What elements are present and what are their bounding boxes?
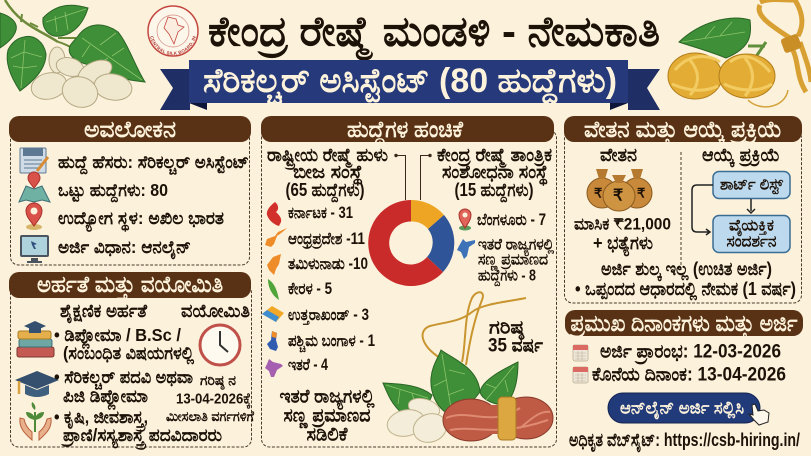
legend text: small numbers in other states: ಇತರೆ ರಾಜ್ಯಗಳಲ್ಲಿ — [478, 236, 555, 257]
icon: computer monitor — [21, 236, 48, 263]
step: personal interview — [713, 216, 790, 252]
institute label: central silk research: ಕೇಂದ್ರ ರೇಷ್ಮೆ ತಾಂತ್ರಿಕ — [437, 145, 552, 168]
legend text: bengaluru: ಬೆಂಗಳೂರು - 7 — [477, 211, 546, 229]
callout: relaxation for other states — [280, 386, 375, 446]
distribution heading: ಹುದ್ದೆಗಳ ಹಂಚಿಕೆ — [347, 116, 464, 146]
icon: clock — [200, 325, 240, 365]
ribbon banner — [160, 60, 660, 110]
legend: state list — [262, 202, 375, 377]
subheading: selection process: ಆಯ್ಕೆ ಪ್ರಕ್ರಿಯೆ — [702, 145, 780, 167]
state: west bengal: ಪಶ್ಚಿಮ ಬಂಗಾಳ - 1 — [288, 332, 375, 353]
salary amount: ಮಾಸಿಕ ₹21,000 — [574, 214, 671, 234]
ribbon banner: ಸೆರಿಕಲ್ಚರ್ ಅಸಿಸ್ಟೆಂಟ್ (80 ಹುದ್ದೆಗಳು) — [203, 62, 617, 105]
education text: diploma: • ಡಿಪ್ಲೋಮಾ / B.Sc / — [54, 325, 181, 350]
institute label: national silkworm seed — [267, 145, 388, 203]
panel: overview — [9, 116, 251, 265]
state: others: ಇತರೆ - 4 — [288, 356, 329, 374]
legend text: small numbers in other states — [478, 236, 555, 287]
icon: graduation cap — [15, 371, 59, 397]
callout: maximum 35 years: ಗರಿಷ್ಠ — [489, 318, 525, 341]
illustration: mulberry leaves and cocoons, top left — [0, 0, 145, 112]
state: kerala: ಕೇರಳ - 5 — [288, 280, 332, 298]
state: west bengal — [267, 331, 375, 353]
age text: maximum as on date: ಮೀಸಲಾತಿ ವರ್ಗಗಳಿಗೆ — [166, 408, 254, 424]
institute label: central silk research: ಸಂಶೋಧನಾ ಸಂಸ್ಥೆ — [442, 162, 548, 186]
callout: relaxation for other states: ಇತರೆ ರಾಜ್ಯಗಳಲ್ಲಿ — [280, 386, 375, 411]
education text: sericulture degree: • ಸೆರಿಕಲ್ಚರ್ ಪದವಿ ಅಥವಾ — [54, 367, 193, 390]
subheading: age limit: ವಯೋಮಿತಿ — [181, 301, 250, 321]
legend text: small numbers in other states: ಸಣ್ಣ ಪ್ರಮಾಣದ — [478, 252, 548, 271]
overview heading: ಅವಲೋಕನ — [84, 116, 176, 142]
step: shortlist: ಶಾರ್ಟ್ ಲಿಸ್ಟ್ — [720, 176, 784, 196]
button: apply online — [608, 393, 760, 423]
panel: salary and selection process — [564, 116, 802, 303]
arrow: side connector — [692, 185, 713, 235]
overview text: application mode: ಅರ್ಜಿ ವಿಧಾನ: ಆನಲೈನ್ — [58, 237, 191, 260]
step: personal interview: ವೈಯಕ್ತಿಕ — [729, 218, 774, 237]
overview text: post name: ಹುದ್ದೆ ಹೆಸರು: ಸೆರಿಕಲ್ಚರ್ ಅಸಿಸ್ಟೆಂಟ್ — [58, 152, 249, 175]
icon: rupee money bags — [587, 169, 652, 211]
overview heading — [9, 116, 251, 142]
panel: post distribution — [261, 116, 556, 447]
note: no application fee: ಅರ್ಜಿ ಶುಲ್ಕ ಇಲ್ಲ (ಉಚಿತ ಅರ್ಜಿ) — [601, 259, 772, 281]
panel: key dates and application — [565, 310, 803, 453]
state: andhra pradesh — [265, 228, 365, 250]
state: kerala — [268, 279, 332, 300]
donut chart — [368, 200, 454, 286]
title: ಕೇಂದ್ರ ರೇಷ್ಮೆ ಮಂಡಳಿ - ನೇಮಕಾತಿ — [208, 8, 660, 61]
overview text: job location: ಉದ್ಯೋಗ ಸ್ಥಳ: ಅಖಿಲ ಭಾರತ — [58, 208, 225, 232]
state: andhra pradesh: ಆಂಧ್ರಪ್ರದೇಶ -11 — [288, 230, 365, 250]
logo: central silk board seal — [147, 5, 199, 57]
age text: maximum as on date: ಗರಿಷ್ಠ ನ — [200, 372, 236, 390]
subheading: education: ಶೈಕ್ಷಣಿಕ ಅರ್ಹತೆ — [60, 301, 148, 324]
icon: books and cap — [17, 321, 54, 357]
education text: agriculture biology graduates: • ಕೃಷಿ, ಜೀವಶಾಸ್ತ್ರ, — [54, 407, 148, 432]
callout: relaxation for other states: ಸಣ್ಣ ಪ್ರಮಾಣದ — [284, 406, 370, 430]
leader lines — [395, 154, 431, 200]
state: uttarakhand: ಉತ್ತರಾಖಂಡ್ - 3 — [288, 306, 369, 325]
age text: maximum as on date — [166, 372, 254, 424]
icon: jobs newspaper — [20, 148, 48, 173]
icon: location pin bengaluru — [459, 209, 471, 230]
state: tamil nadu: ತಮಿಳುನಾಡು -10 — [288, 255, 368, 273]
icon: calendar end — [573, 367, 588, 383]
salary heading: ವೇತನ ಮತ್ತು ಆಯ್ಕೆ ಪ್ರಕ್ರಿಯೆ — [584, 116, 782, 145]
age text: maximum as on date: 13-04-2026ಕ್ಕೆ — [176, 390, 251, 410]
distribution heading — [261, 116, 554, 146]
education text: sericulture degree: ಪಿಜಿ ಡಿಪ್ಲೋಮಾ — [63, 386, 148, 411]
overview text: total posts: ಒಟ್ಟು ಹುದ್ದೆಗಳು: 80 — [58, 180, 168, 203]
button: apply online: ಆನ್‌ಲೈನ್ ಅರ್ಜಿ ಸಲ್ಲಿಸಿ — [620, 398, 744, 420]
step: personal interview: ಸಂದರ್ಶನ — [726, 234, 777, 250]
subheading: salary: ವೇತನ — [600, 145, 637, 165]
education text: diploma: (ಸಂಬಂಧಿತ ವಿಷಯಗಳಲ್ಲಿ — [63, 343, 195, 365]
icon: calendar start — [573, 345, 588, 361]
institute label: central silk research — [437, 145, 552, 203]
flowchart: selection steps — [692, 172, 790, 252]
icon: location pin — [26, 203, 42, 230]
callout: relaxation for other states: ಸಡಿಲಿಕೆ — [306, 424, 349, 446]
state: karnataka — [267, 202, 353, 226]
callout: maximum 35 years: 35 ವರ್ಷ — [488, 336, 543, 356]
education text: diploma — [54, 325, 195, 365]
institute label: central silk research: (15 ಹುದ್ದೆಗಳು) — [454, 180, 534, 203]
icon: india map blue — [457, 239, 475, 259]
icon: rupee money bags: ₹ — [613, 188, 623, 204]
institute label: national silkworm seed: (65 ಹುದ್ದೆಗಳು) — [286, 180, 364, 203]
icon: rupee money bags: ₹ — [594, 186, 603, 200]
state: others — [265, 356, 329, 377]
institute label: national silkworm seed: ರಾಷ್ಟ್ರೀಯ ರೇಷ್ಮೆ ಹುಳು — [267, 145, 388, 170]
state: tamil nadu — [267, 254, 368, 275]
salary amount — [574, 214, 671, 257]
icon: rupee money bags: ₹ — [637, 186, 646, 200]
state: uttarakhand — [262, 306, 369, 325]
education text: agriculture biology graduates — [54, 407, 222, 450]
callout: maximum 35 years — [488, 318, 543, 356]
icon: hands with sprout — [20, 402, 51, 440]
illustration: golden silk and leaf, top right — [668, 0, 811, 107]
date: application start: ಅರ್ಜಿ ಪ್ರಾರಂಭ: 12-03-2026 — [600, 342, 781, 364]
legend text: small numbers in other states: ಹುದ್ದೆಗಳು - 8 — [478, 268, 536, 287]
icon: pointing hand — [749, 404, 769, 425]
institute label: national silkworm seed: ಬೀಜ ಸಂಸ್ಥೆ — [293, 162, 363, 186]
state: karnataka: ಕರ್ನಾಟಕ - 31 — [288, 204, 353, 222]
date: last date: ಕೊನೆಯ ದಿನಾಂಕ: 13-04-2026 — [592, 364, 786, 386]
salary amount: + ಭತ್ಯೆಗಳು — [593, 233, 653, 257]
eligibility heading: ಅರ್ಹತೆ ಮತ್ತು ವಯೋಮಿತಿ — [37, 271, 223, 300]
panel: eligibility and age limit — [9, 271, 254, 450]
illustration: silk thread, leaves, cocoons and red yarn — [383, 292, 553, 447]
arrow: shortlist to interview — [747, 199, 755, 213]
education text: agriculture biology graduates: ಪ್ರಾಣಿ/ಸಸ್ಯಶಾಸ್ತ್ರ ಪದವಿದಾರರು — [60, 425, 222, 450]
education text: sericulture degree — [54, 367, 193, 411]
icon: map with pin — [19, 172, 50, 202]
